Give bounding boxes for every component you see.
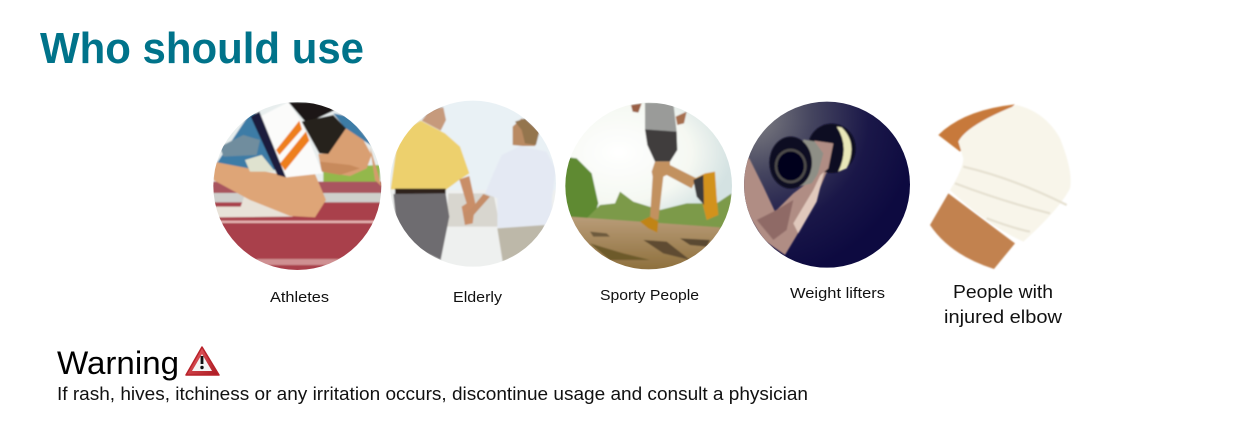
photo: bandaged elbow — [930, 104, 1071, 269]
photo: weight lifters — [740, 100, 913, 270]
label: athletes: Athletes — [270, 289, 329, 306]
label: sporty people: Sporty People — [600, 287, 699, 304]
warning heading: Warning — [57, 345, 179, 381]
title: Who should use — [40, 24, 364, 73]
photo: elderly — [387, 98, 560, 270]
label: elderly: Elderly — [453, 289, 503, 306]
label: people with injured elbow: injured elbow — [944, 307, 1063, 327]
warning text: If rash, hives, itchiness or any irritation occurs, discontinue usage and consult a physician — [57, 384, 808, 404]
photo: sporty people — [563, 100, 737, 270]
photo: athletes — [210, 100, 387, 276]
icon: warning triangle — [186, 347, 219, 375]
label: people with injured elbow: People with — [953, 282, 1053, 302]
label: weight lifters: Weight lifters — [790, 285, 885, 302]
label: people with injured elbow — [944, 282, 1063, 327]
